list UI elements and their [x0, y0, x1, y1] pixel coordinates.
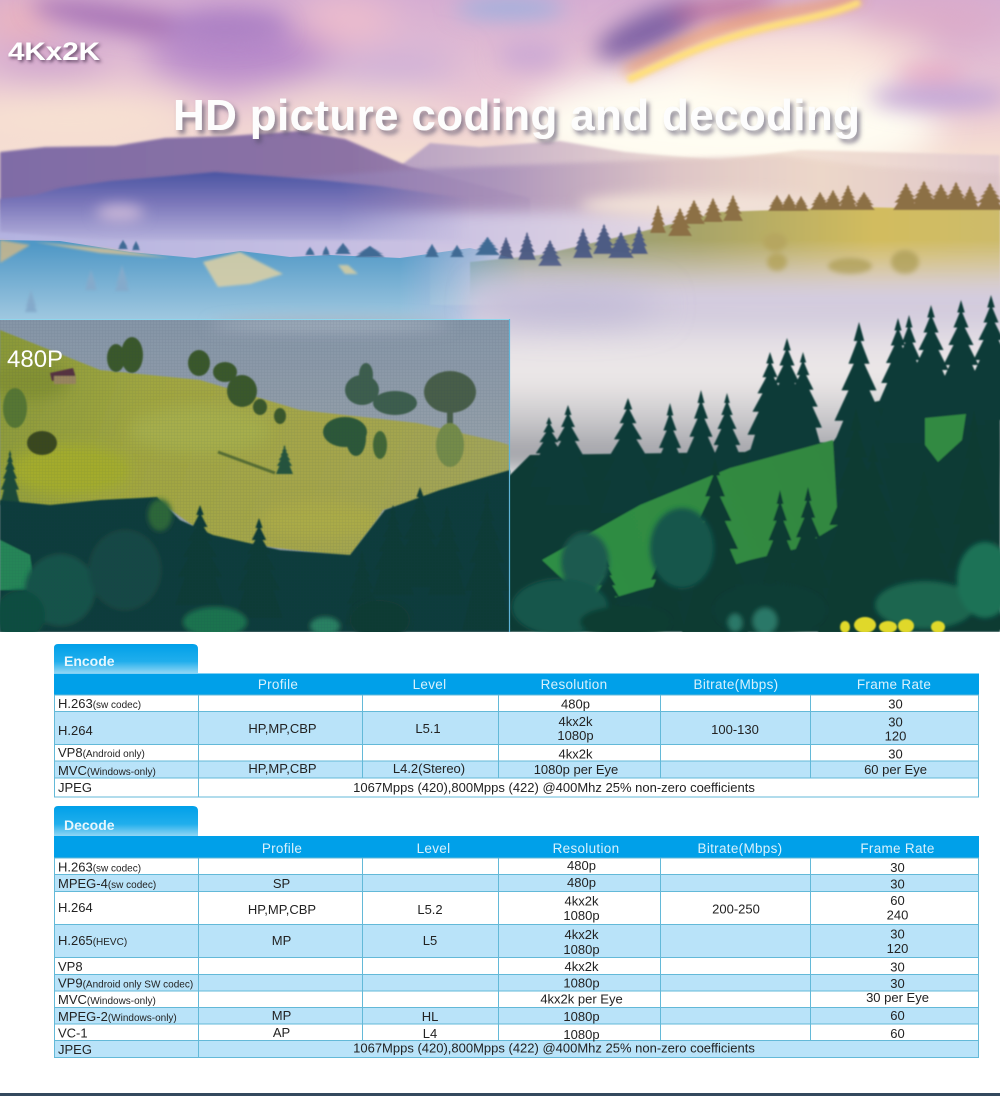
row: MVC — [58, 761, 927, 778]
row: H.265: 120 — [887, 941, 908, 956]
row: MVC: MVC(Windows-only) — [58, 992, 156, 1007]
row: MVC: 1080p per Eye — [534, 762, 618, 777]
right forest and green slope — [505, 295, 1000, 638]
row: H.264: 4kx2k — [559, 714, 593, 729]
row: MPEG-2: 60 — [890, 1008, 905, 1023]
row: MVC — [58, 990, 929, 1007]
row: MVC: 30 per Eye — [866, 990, 929, 1005]
left blue hills — [0, 237, 530, 325]
sky — [0, 0, 1000, 210]
row: H.264: H.264 — [58, 900, 93, 915]
row: H.264: 120 — [885, 728, 906, 744]
row: H.263: 30 — [888, 696, 903, 712]
row: VP8: 4kx2k — [565, 959, 599, 974]
title: HD picture coding and decoding — [173, 91, 860, 140]
panel: decode table — [54, 806, 979, 1058]
row: MVC: HP,MP,CBP — [248, 761, 317, 776]
row: VC-1 — [58, 1025, 905, 1042]
row: JPEG: JPEG — [58, 1042, 92, 1057]
row: H.264: 240 — [887, 908, 908, 922]
row: H.265: MP — [272, 933, 291, 948]
row: H.264: HP,MP,CBP — [248, 902, 316, 917]
row: MPEG-4 — [58, 875, 905, 892]
encode header row — [54, 674, 979, 695]
bottom bar — [0, 1093, 1000, 1096]
row: H.263: H.263(sw codec) — [58, 696, 141, 711]
decode header row: Profile — [262, 841, 302, 856]
row: H.264: L5.1 — [415, 721, 441, 736]
row: H.265: 1080p — [563, 942, 600, 957]
row: H.263 — [58, 696, 903, 712]
row: VC-1: 60 — [890, 1026, 905, 1041]
row: MVC: 60 per Eye — [864, 762, 927, 777]
row: H.265: H.265(HEVC) — [58, 933, 127, 948]
480P inset box — [0, 318, 512, 640]
decode header row: Level — [417, 841, 450, 856]
label: 480P: 480P — [7, 346, 63, 373]
panel: landscape photo — [0, 0, 1000, 640]
encode header row: Profile — [258, 677, 298, 692]
row: H.264: 200-250 — [712, 902, 760, 916]
encode tab — [54, 644, 198, 673]
row: H.265 — [58, 926, 908, 957]
row: H.264: 30 — [888, 714, 903, 730]
distant mountains — [0, 130, 1000, 319]
row: H.264: 100-130 — [711, 722, 759, 737]
decode rows — [58, 858, 929, 1057]
row: H.263: 30 — [890, 860, 905, 875]
row: H.264: 1080p — [563, 908, 600, 923]
row: JPEG: 1067Mpps (420),800Mpps (422) @400Mhz 25% non-zero coefficients — [353, 1040, 755, 1056]
row: MPEG-2 — [58, 1008, 905, 1024]
row: JPEG: 1067Mpps (420),800Mpps (422) @400Mhz 25% non-zero coefficients — [353, 780, 755, 795]
encode header row: Bitrate(Mbps) — [694, 677, 778, 692]
row: JPEG — [58, 1040, 755, 1057]
row: VC-1: VC-1 — [58, 1026, 88, 1040]
decode header row: Frame Rate — [860, 841, 935, 856]
decode header row: Resolution — [553, 841, 619, 856]
encode tab: Encode — [64, 653, 115, 669]
row: H.265: L5 — [423, 933, 437, 948]
yellow flowers — [840, 617, 945, 633]
row: VP9 — [58, 976, 905, 991]
encode grid — [54, 695, 978, 797]
encode header row: Frame Rate — [857, 677, 931, 692]
decode tab: Decode — [64, 817, 115, 833]
decode tab — [54, 806, 198, 836]
row: VP8: 30 — [890, 960, 905, 974]
label: 4Kx2K: 4Kx2K — [8, 38, 100, 66]
row: VP9: 1080p — [563, 976, 600, 990]
row: VP8: VP8 — [58, 959, 83, 974]
row: H.264: HP,MP,CBP — [248, 721, 317, 736]
mist clouds — [96, 193, 820, 221]
row: MPEG-4: MPEG-4(sw codec) — [58, 876, 156, 891]
encode rows — [58, 696, 927, 795]
row: VC-1: AP — [273, 1025, 290, 1040]
row: H.263 — [58, 858, 905, 875]
row: MPEG-4: SP — [273, 876, 290, 891]
row: VP8: VP8(Android only) — [58, 745, 145, 760]
row: MPEG-2: MPEG-2(Windows-only) — [58, 1009, 177, 1024]
row: MVC: MVC(Windows-only) — [58, 763, 156, 778]
row: VP8: 4kx2k — [559, 746, 593, 762]
row: H.263: 480p — [567, 858, 596, 873]
row: H.264: H.264 — [58, 723, 93, 738]
row: MPEG-2: HL — [422, 1009, 438, 1024]
row: JPEG: JPEG — [58, 780, 92, 795]
row: VP8 — [58, 959, 905, 974]
row: JPEG — [58, 780, 755, 795]
row: MVC: 4kx2k per Eye — [540, 992, 623, 1006]
row: VC-1: L4 — [423, 1026, 437, 1041]
decode header row: Bitrate(Mbps) — [698, 841, 782, 856]
row: H.265: 4kx2k — [565, 927, 599, 942]
inset trees and house — [0, 337, 476, 505]
row: MPEG-2: MP — [272, 1008, 291, 1023]
row: MPEG-2: 1080p — [563, 1009, 600, 1024]
panel: encode table — [54, 644, 979, 797]
inset hillside — [0, 330, 509, 557]
row: H.264 — [58, 893, 908, 923]
encode header row: Resolution — [541, 677, 607, 692]
row: VP8 — [58, 745, 903, 762]
encode header row: Level — [413, 677, 446, 692]
row: VP8: 30 — [888, 746, 903, 762]
decode grid — [54, 858, 978, 1058]
row: H.264: L5.2 — [417, 902, 443, 917]
row: VP9: VP9(Android only SW codec) — [58, 976, 193, 990]
row: MPEG-4: 30 — [890, 876, 905, 892]
row: H.263: H.263(sw codec) — [58, 860, 141, 874]
inset forest — [0, 470, 512, 640]
right sunlit hill — [430, 181, 1000, 305]
row: H.265: 30 — [890, 926, 905, 942]
row: VC-1: 1080p — [563, 1027, 600, 1042]
row: MPEG-4: 480p — [567, 875, 596, 890]
row: MVC: L4.2(Stereo) — [393, 761, 465, 776]
row: VP9: 30 — [890, 976, 905, 991]
row: H.264 — [58, 714, 906, 744]
row: H.263: 480p — [561, 696, 590, 712]
row: H.264: 60 — [890, 893, 905, 908]
row: H.264: 1080p — [557, 728, 594, 743]
row: H.264: 4kx2k — [565, 894, 599, 908]
right valley mist — [470, 270, 1000, 470]
decode header row — [54, 836, 979, 858]
